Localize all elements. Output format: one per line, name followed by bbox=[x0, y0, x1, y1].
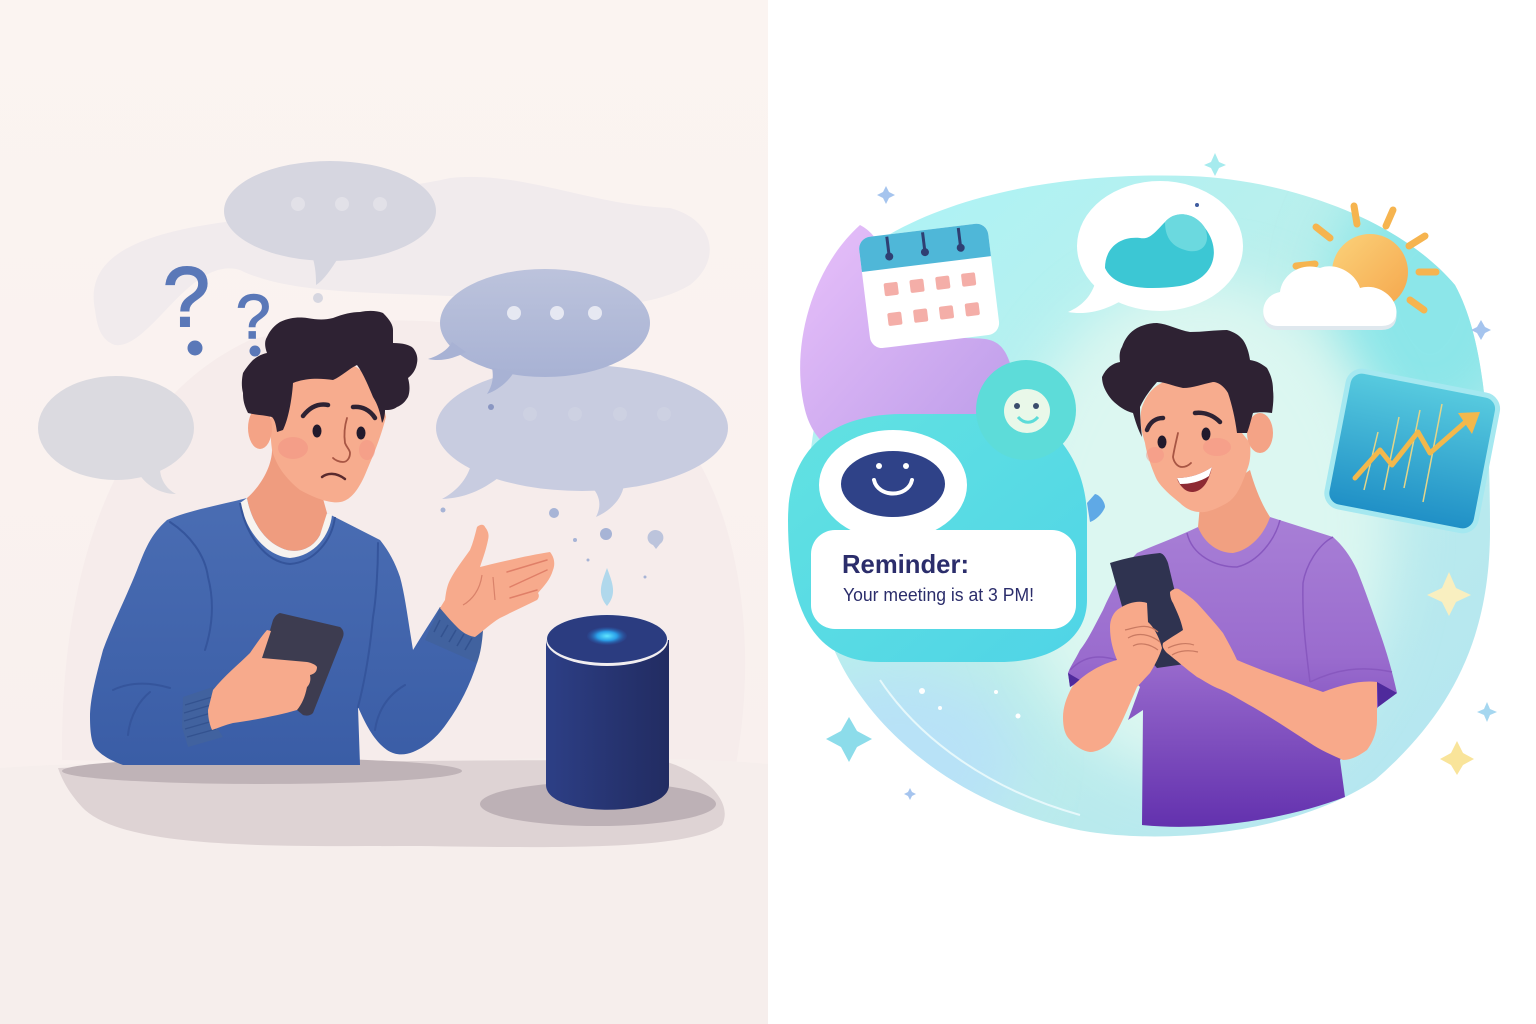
cheeks bbox=[278, 437, 308, 459]
ear bbox=[1247, 413, 1273, 453]
person shadow on table bbox=[62, 758, 462, 784]
sweater collar band bbox=[240, 503, 335, 564]
reminder message: Your meeting is at 3 PM! bbox=[843, 585, 1034, 605]
speech bubble: left bbox=[38, 376, 194, 494]
neck bbox=[1198, 470, 1270, 553]
panel: right scene bbox=[780, 153, 1530, 850]
chatbot panel bbox=[788, 360, 1105, 662]
faded cloud background bbox=[94, 177, 710, 345]
t-shirt bbox=[1068, 517, 1397, 827]
panel: left scene bbox=[0, 161, 768, 1024]
lilac shape bbox=[800, 225, 1013, 470]
panel: right background bbox=[768, 0, 1536, 1024]
open smile bbox=[1177, 467, 1212, 492]
icon: small smiley bot bbox=[976, 360, 1076, 460]
sweater shading bbox=[113, 522, 405, 735]
ear bbox=[248, 407, 272, 449]
sleeve undersides bbox=[1068, 673, 1397, 707]
raised hand bbox=[440, 525, 554, 637]
upper right teal glow bbox=[1310, 206, 1484, 392]
speech bubble: top bbox=[224, 161, 436, 303]
speech bubble: dark middle bbox=[428, 269, 650, 410]
lower left blue glow bbox=[850, 681, 1000, 805]
brows bbox=[1147, 413, 1220, 430]
nose bbox=[1173, 433, 1191, 467]
left arm and hand bbox=[1063, 602, 1162, 752]
collar bbox=[240, 498, 332, 558]
pale centre bbox=[1010, 280, 1390, 780]
right hand fingers bbox=[1168, 644, 1198, 655]
person: frustrated man bbox=[90, 311, 554, 765]
sparkles bbox=[826, 153, 1497, 800]
speaker shadow bbox=[480, 782, 716, 826]
reminder card bbox=[811, 530, 1076, 629]
table shadow bbox=[58, 760, 725, 847]
holding hand bbox=[208, 630, 317, 730]
pale halo behind person bbox=[62, 320, 745, 770]
reminder heading: Reminder: bbox=[842, 549, 969, 579]
face bbox=[270, 359, 386, 502]
icon: sun and cloud bbox=[1263, 206, 1436, 330]
droplets rising from speaker bbox=[440, 508, 663, 578]
icon: smart speaker bbox=[546, 568, 669, 810]
shirt seams bbox=[1070, 520, 1392, 682]
speech bubble: large lower bbox=[436, 365, 728, 517]
panel: left background bbox=[0, 0, 768, 1024]
swirling blob background bbox=[811, 176, 1490, 836]
palm lines bbox=[507, 560, 547, 598]
person: happy man bbox=[1063, 323, 1397, 827]
left hand fingers bbox=[1125, 626, 1160, 650]
hair bbox=[242, 311, 417, 432]
cheeks bbox=[1203, 438, 1231, 456]
right arm and hand bbox=[1163, 589, 1377, 760]
sweater bbox=[90, 498, 483, 765]
cuff right bbox=[425, 607, 483, 663]
eyes bbox=[1158, 436, 1166, 448]
icon: large smiley bot bbox=[819, 430, 967, 540]
question marks: ? bbox=[163, 250, 210, 344]
mouth bbox=[322, 474, 345, 479]
speech bubble: white with teal shape bbox=[1068, 181, 1243, 313]
question marks: ? bbox=[236, 283, 270, 352]
phone bbox=[262, 613, 344, 716]
icon: calendar bbox=[858, 222, 1000, 349]
nose bbox=[333, 418, 350, 462]
phone bbox=[1110, 553, 1192, 668]
question marks bbox=[163, 250, 270, 356]
floor bbox=[0, 758, 768, 1024]
hair bbox=[1102, 323, 1273, 437]
neck bbox=[247, 450, 327, 551]
brows bbox=[303, 404, 375, 418]
face bbox=[1141, 378, 1250, 512]
cuff left bbox=[182, 687, 223, 747]
icon: growth chart card bbox=[1324, 369, 1500, 533]
eyes bbox=[312, 424, 322, 438]
